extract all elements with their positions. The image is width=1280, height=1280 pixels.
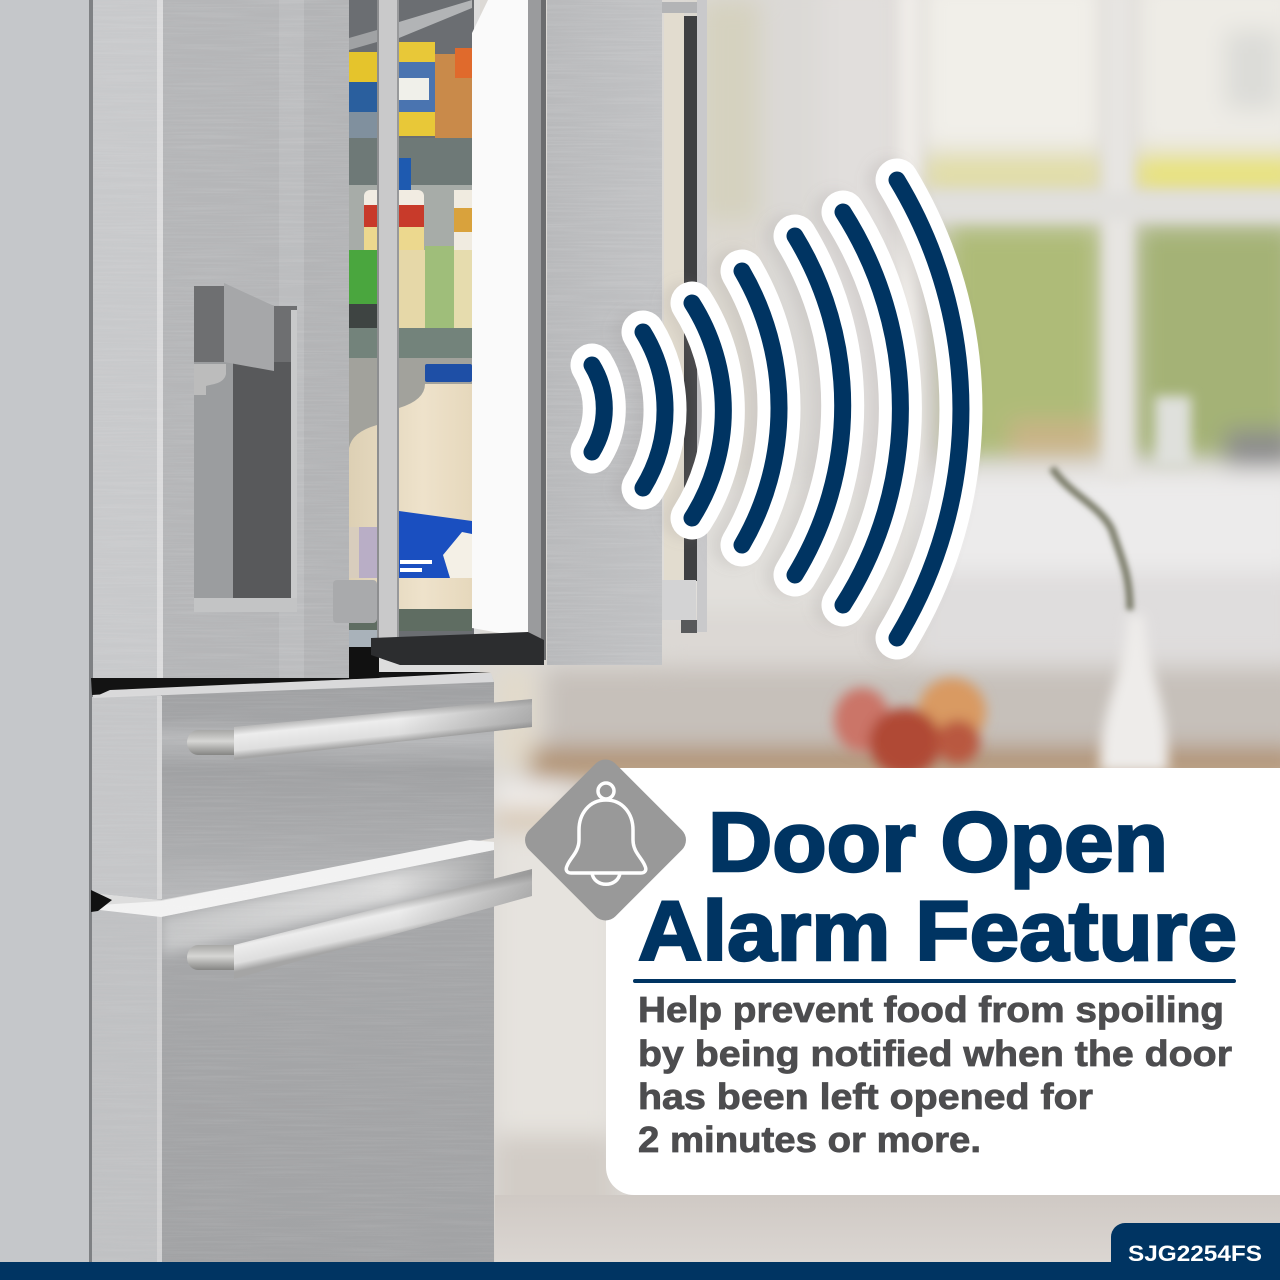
lower drawer [91,840,494,1262]
description text: has been left opened for [638,1076,1093,1117]
water dispenser [194,283,297,612]
heading: door open alarm feature: Door Open [708,795,1168,889]
description text: Help prevent food from spoiling [638,989,1224,1030]
door outer face [547,0,662,665]
heading: door open alarm feature [638,795,1237,978]
top shelf cans [349,52,377,114]
description text: by being notified when the door [638,1033,1232,1074]
description text: 2 minutes or more. [638,1119,981,1160]
milk jug [349,384,472,609]
upper drawer [92,673,494,900]
lower drawer handle [187,869,532,979]
dispenser control panel [224,283,274,371]
condiment bottles [364,190,424,250]
icon: bell in diamond [519,754,692,926]
model number tag: SJG2254FS [1128,1241,1262,1266]
left door [93,0,349,678]
gap under upper doors [91,672,491,695]
refrigerator side [0,0,91,1262]
left hinge [333,580,377,623]
icon: sound waves [592,180,961,638]
bottom strip background [495,1195,1280,1262]
blurred kitchen background [480,0,1280,1280]
heading divider [633,979,1236,983]
door gasket [472,0,528,638]
lower drawer top edge [100,840,494,917]
open door [333,0,707,665]
door handle [662,0,707,633]
footer bar [0,1262,1280,1280]
door vertical bar [377,0,399,638]
upper drawer handle [187,699,532,760]
panel: feature description [606,768,1280,1195]
lower drawer reflection [162,857,478,956]
model number tag [1111,1223,1280,1280]
heading: door open alarm feature: Alarm Feature [638,884,1237,978]
description text [638,989,1232,1160]
door bin [349,250,377,304]
door bottom edge [371,632,544,665]
fridge interior [349,0,474,679]
refrigerator [0,0,707,1262]
dispenser nozzle [194,364,226,395]
